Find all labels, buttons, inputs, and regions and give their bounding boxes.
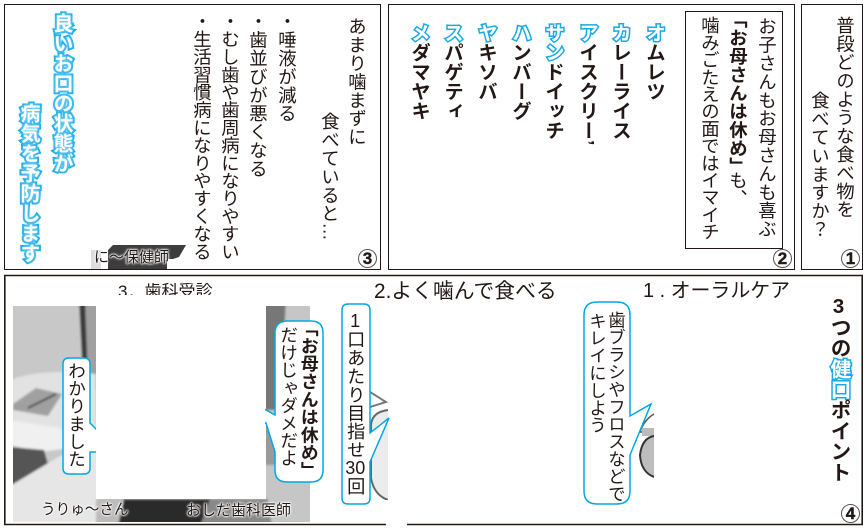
speech bubble: thirty chews: 1 口あたり目指せ 30 回 [345, 312, 365, 496]
number badge 2: 2 [778, 249, 787, 268]
list: soft foods: カ レーライス [608, 23, 630, 140]
illustration: tooth and brush [639, 413, 654, 478]
text box: soft food note: 「お母さんは休め 」も、 [727, 10, 748, 207]
panel 3: effects of not chewing [4, 4, 381, 270]
speech bubble: not only soft food [265, 319, 324, 483]
list: soft foods: サン ドイッチ [542, 23, 564, 140]
speech bubble: not only soft food: だけじゃダメだよ [279, 326, 299, 467]
text: what foods do you eat [809, 16, 855, 238]
list: soft foods: ス パゲティ [440, 23, 462, 120]
number badge 3 [358, 249, 377, 268]
heading: oral care: 1 . オーラルケア [643, 280, 790, 302]
headline: good oral health prevents disease: 良いお口の状態が [50, 13, 72, 173]
list: health effects: ・むし歯や歯周病になりやすい [219, 12, 240, 260]
list: soft foods: オ ムレツ [642, 23, 664, 101]
text box: soft food note: お子さんもお母さんも喜ぶ [756, 17, 777, 238]
number badge 1: 1 [846, 249, 855, 268]
text: not chewing lead-in: 食べていると… [319, 112, 340, 241]
list: health effects: ・生活習慣病になりやすくなる [191, 12, 212, 260]
number badge 2 [773, 249, 792, 268]
speech bubble: brush and floss [583, 301, 652, 505]
photo: dental consultation [13, 306, 310, 522]
list: health effects: ・唾液が減る [276, 12, 297, 122]
text: not chewing lead-in: あまり噛まずに [346, 17, 367, 146]
photo strip with caption: nurse [91, 245, 186, 269]
speech bubble: understood [62, 357, 96, 475]
text box: soft food note: 噛みごたえの面ではイマイチ [699, 16, 720, 240]
panel 2: popular foods [388, 4, 795, 270]
headline: good oral health prevents disease: 病気を予防します [17, 103, 39, 263]
speech bubble: brush and floss: キレイにしよう [587, 312, 607, 434]
number badge 1 [841, 249, 860, 268]
list: soft foods: ハ ンバーグ [508, 23, 530, 120]
caption: patient name: うりゅ〜さん [41, 502, 129, 518]
list: soft foods: ヤ キソバ [474, 23, 496, 101]
list: soft foods: ア イスクリー’ [576, 23, 598, 145]
number badge 4: 4 [846, 504, 855, 523]
speech bubble: thirty chews [341, 303, 390, 505]
list: health effects [191, 12, 297, 260]
text box: soft food note [685, 11, 783, 249]
list: soft foods: メ ダマヤキ [408, 23, 430, 120]
number badge 4 [841, 504, 860, 523]
speech bubble: not only soft food: 「お母さんは休め」 [299, 319, 319, 479]
list: health effects: ・歯並びが悪くなる [247, 12, 268, 178]
speech bubble: understood: わかりました [67, 362, 87, 468]
caption: dentist name: おしだ歯科医師 [186, 502, 291, 519]
headline: good oral health prevents disease [17, 10, 78, 264]
text: what foods do you eat: 普段どのような食べ物を [834, 16, 855, 218]
list: soft foods [408, 22, 666, 145]
photo strip with caption: nurse: に〜保健師 [94, 249, 169, 266]
number badge 3: 3 [363, 249, 372, 268]
heading: chew well: 2.よく噛んで食べる [374, 280, 557, 303]
title: three healthy mouth points: 3 つの 健口 ポイント [827, 296, 850, 482]
text: what foods do you eat: 食べていますか？ [809, 91, 830, 238]
text: not chewing lead-in [319, 17, 367, 241]
panel 1: question [801, 4, 863, 270]
speech bubble: brush and floss: 歯ブラシやフロスなどで [606, 311, 626, 502]
illustration: tooth behind bubble [370, 391, 388, 500]
